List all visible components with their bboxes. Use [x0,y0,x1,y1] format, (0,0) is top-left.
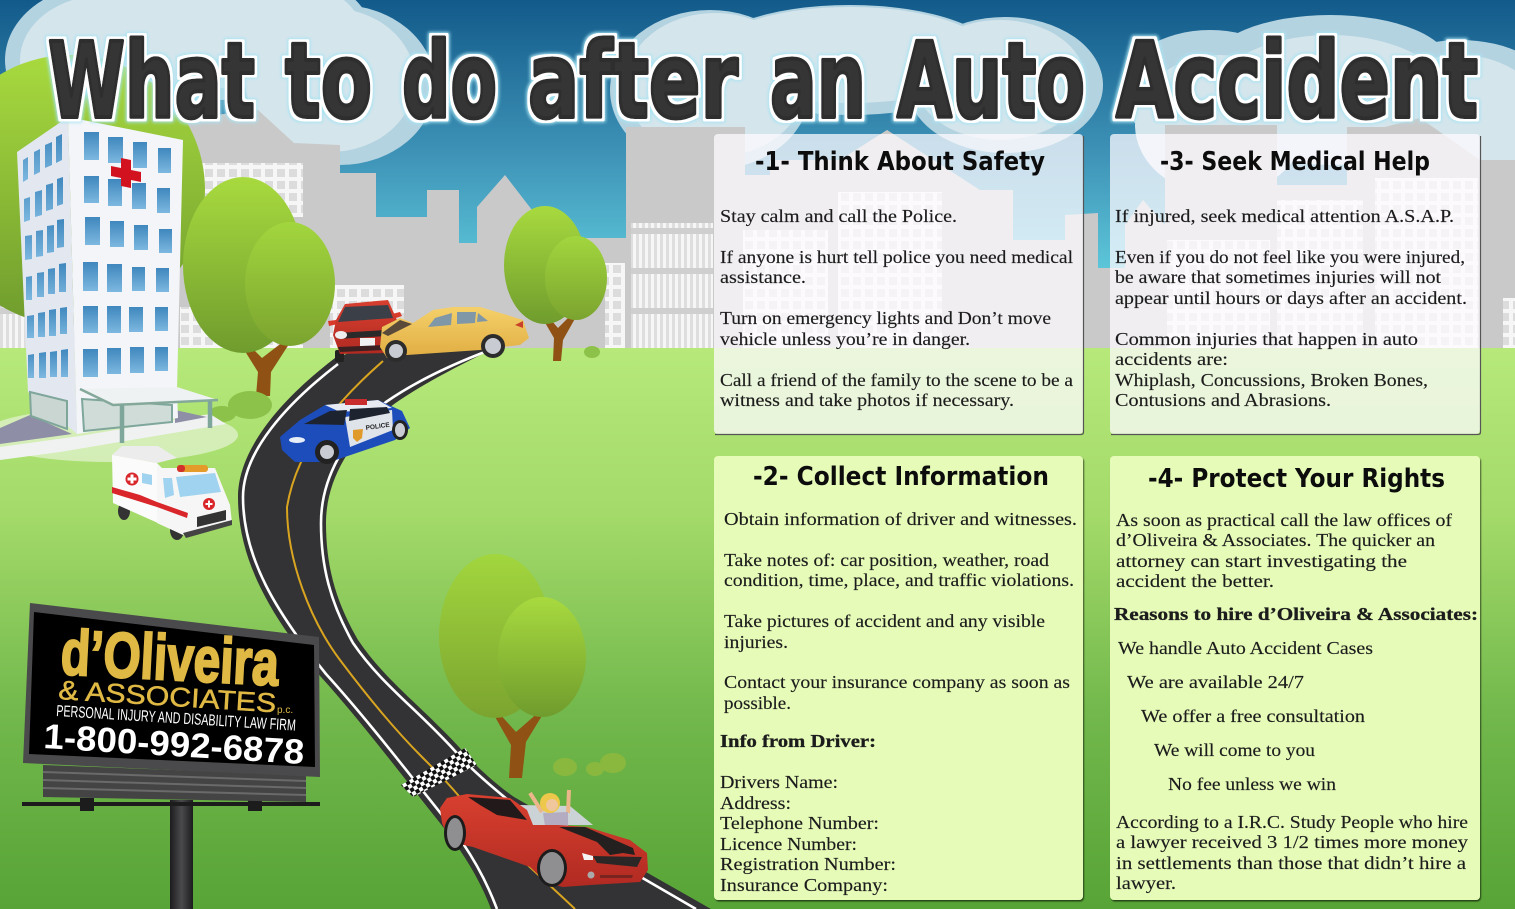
text block 4: accident the better. [1116,571,1274,591]
title [48,20,1478,142]
red car front [328,300,402,362]
text block 2: Telephone Number: [720,813,879,833]
heading 2: -2- Collect Information [753,462,1049,492]
tree beside hospital [183,177,335,396]
text block 1: Call a friend of the family to the scene to be a [720,370,1073,390]
text block 2: Obtain information of driver and witnesses. [724,509,1077,529]
text block 4: a lawyer received 3 1/2 times more money [1116,832,1468,852]
tree by convertible [439,554,586,778]
panel 3: seek medical help [1110,134,1480,434]
text block 2: Drivers Name: [720,772,838,792]
text block 4: We offer a free consultation [1141,706,1365,726]
text block 2: Insurance Company: [720,875,888,895]
text block 4: attorney can start investigating the [1116,551,1407,571]
police car [280,399,410,464]
red cross [111,158,141,188]
text block 4: We handle Auto Accident Cases [1118,638,1373,658]
road [238,335,711,909]
text block 3 [1115,206,1467,410]
text block 2: Contact your insurance company as soon as [724,672,1070,692]
clouds [5,0,1515,195]
road centre line [287,361,575,909]
text block 2: injuries. [724,632,788,652]
heading 1: -1- Think About Safety [755,147,1045,177]
text block 2: Take notes of: car position, weather, road [724,550,1049,570]
canopy [80,387,218,405]
text block 1: assistance. [720,267,806,287]
heading 4: -4- Protect Your Rights [1148,464,1445,494]
panel 2: collect information [714,456,1083,900]
billboard text: p.c. [277,705,293,716]
bushes [208,346,626,776]
billboard text [43,616,305,772]
text block 2: condition, time, place, and traffic violations. [724,570,1074,590]
billboard text: PERSONAL INJURY AND DISABILITY LAW FIRM [56,703,296,735]
text block 3: accidents are: [1115,349,1228,369]
text block 1: witness and take photos if necessary. [720,390,1014,410]
text block 2: Address: [720,793,791,813]
text block 1: Turn on emergency lights and Don’t move [720,308,1051,328]
city skyline [0,110,1515,350]
road edge lines [243,350,696,909]
text block 3: Contusions and Abrasions. [1115,390,1331,410]
text block 3: Common injuries that happen in auto [1115,329,1418,349]
windshield [520,805,593,825]
text block 2: Licence Number: [720,834,857,854]
title: What [48,20,255,142]
red convertible with driver [440,790,648,887]
billboard post [170,800,193,909]
text block 3: Even if you do not feel like you were injured, [1115,247,1465,267]
title: to [285,20,372,142]
text block 4: d’Oliveira & Associates. The quicker an [1116,530,1435,550]
panel 4: protect your rights [1110,456,1480,900]
billboard text: d’Oliveira [59,616,281,699]
hospital windows left [23,134,68,378]
tree behind crash [504,206,607,361]
title: an [770,20,866,142]
text block 4: in settlements than those that didn’t hire a [1116,853,1466,873]
heading 3: -3- Seek Medical Help [1160,147,1430,177]
panel 1: think about safety [714,134,1084,434]
text block 4: We will come to you [1154,740,1315,760]
text block 3: appear until hours or days after an accident. [1115,288,1467,308]
title: after [528,20,738,142]
sky background [0,0,1515,350]
text block 4 [1114,510,1478,893]
text block 4: According to a I.R.C. Study People who hire [1116,812,1468,832]
text block 3: be aware that sometimes injuries will not [1115,267,1441,287]
text block 2: Info from Driver: [720,731,876,751]
text block 4: We are available 24/7 [1127,672,1304,692]
text block 4: As soon as practical call the law offices of [1116,510,1452,530]
ambulance [112,446,232,540]
text block 2: Take pictures of accident and any visible [724,611,1045,631]
billboard [22,603,320,909]
text block 1: If anyone is hurt tell police you need medical [720,247,1073,267]
title: do [402,20,497,142]
text block 3: If injured, seek medical attention A.S.A.P. [1115,206,1454,226]
text block 1 [720,206,1073,410]
billboard grille [43,765,306,802]
text block 2: possible. [724,693,791,713]
ground [0,348,1515,909]
checkered finish band [401,748,477,797]
text block 2: Registration Number: [720,854,896,874]
driver [530,790,569,826]
text block 4: lawyer. [1116,873,1176,893]
tree behind hospital [0,55,205,325]
hospital entrance glass [30,392,67,429]
text block 1: Stay calm and call the Police. [720,206,957,226]
billboard text: & ASSOCIATES [58,675,277,718]
text block 3: Whiplash, Concussions, Broken Bones, [1115,370,1428,390]
text block 4: No fee unless we win [1168,774,1336,794]
hospital [0,117,238,462]
billboard text: 1-800-992-6878 [43,717,305,772]
yellow car [380,307,529,362]
text block 2 [720,509,1077,895]
text block 1: vehicle unless you’re in danger. [720,329,970,349]
billboard frame [23,603,320,777]
police car: POLICE [365,422,391,432]
hospital windows right [83,132,172,377]
text block 4: Reasons to hire d’Oliveira & Associates: [1114,604,1478,624]
title: Auto [897,20,1085,142]
